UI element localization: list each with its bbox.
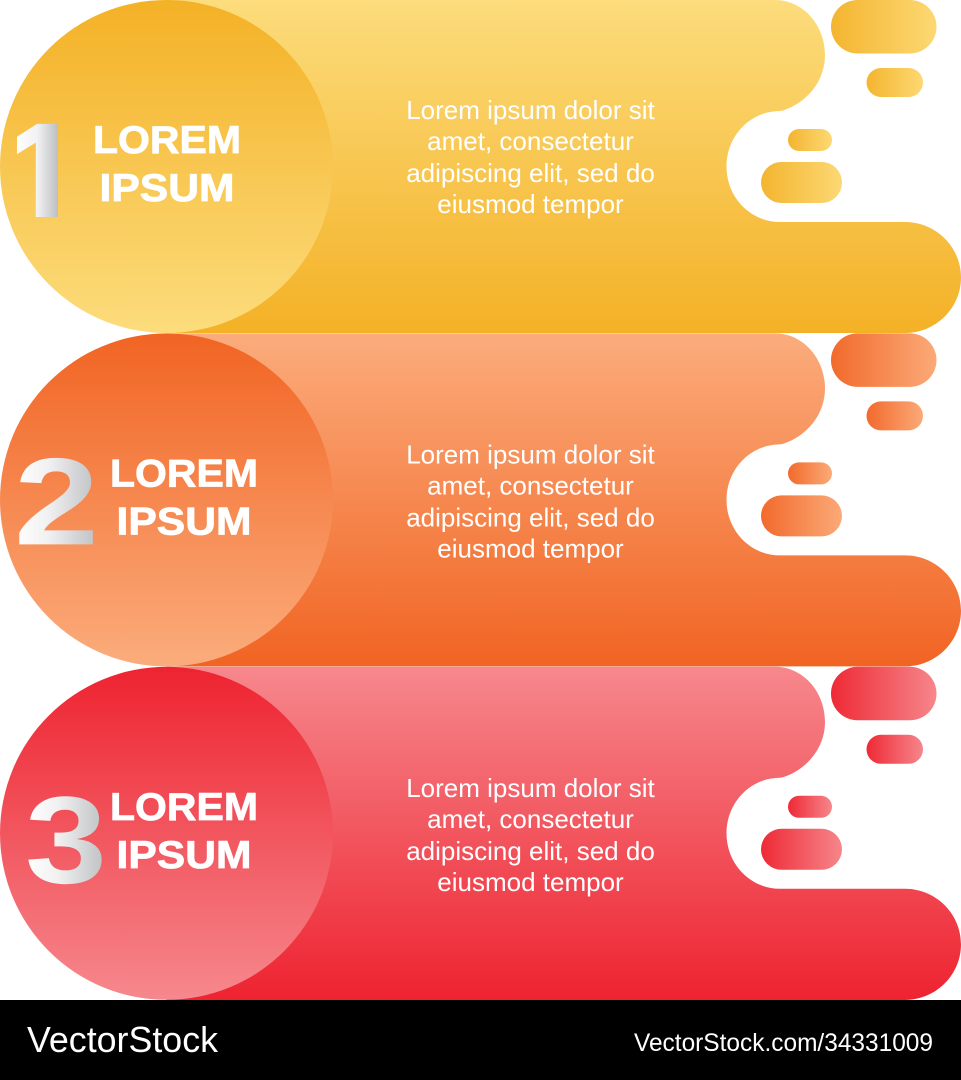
- pill: lower small: [788, 462, 832, 484]
- pill: lower small: [788, 129, 832, 151]
- body text: Lorem ipsum dolor sit: [406, 773, 656, 803]
- band: step 2: [166, 333, 961, 666]
- pill: lower small: [788, 796, 832, 818]
- number 3: 3: [25, 772, 107, 910]
- heading: IPSUM: [116, 500, 252, 543]
- pill: top small: [866, 735, 923, 764]
- body text: Lorem ipsum dolor sit: [406, 95, 656, 125]
- pill: top large: [831, 0, 936, 54]
- body text: amet, consectetur: [427, 126, 634, 156]
- panel: step 1: [0, 0, 961, 333]
- body text: eiusmod tempor: [437, 533, 624, 563]
- body text: adipiscing elit, sed do: [406, 158, 655, 188]
- body text: amet, consectetur: [427, 470, 634, 500]
- circle badge: [0, 333, 333, 666]
- heading: [110, 452, 258, 543]
- footer logo text: VectorStock: [27, 1019, 219, 1060]
- pill: top small: [866, 401, 923, 430]
- body text: eiusmod tempor: [437, 867, 624, 897]
- band: step 3: [166, 667, 961, 1000]
- body text: adipiscing elit, sed do: [406, 502, 655, 532]
- footer bar: [0, 1000, 961, 1080]
- body text: adipiscing elit, sed do: [406, 836, 655, 866]
- heading: LOREM: [93, 119, 241, 162]
- pill: top large: [831, 667, 936, 720]
- body text: Lorem ipsum dolor sit: [406, 439, 656, 469]
- heading: [110, 786, 258, 877]
- panel: step 2: [0, 333, 961, 666]
- heading: IPSUM: [100, 167, 234, 210]
- pill: lower large: [761, 495, 842, 536]
- number 1: 1: [0, 89, 88, 268]
- heading: IPSUM: [116, 834, 252, 877]
- footer image id: VectorStock.com/34331009: [634, 1029, 933, 1057]
- heading: LOREM: [110, 786, 258, 829]
- number 2: 2: [14, 433, 99, 571]
- circle badge: [0, 0, 333, 333]
- heading: [93, 119, 241, 210]
- body text: [406, 773, 656, 897]
- heading: LOREM: [110, 452, 258, 495]
- body text: eiusmod tempor: [437, 189, 624, 219]
- pill: top small: [866, 68, 923, 97]
- pill: top large: [831, 333, 936, 387]
- pill: lower large: [761, 829, 842, 870]
- circle badge: [0, 667, 333, 1000]
- body text: [406, 95, 656, 219]
- pill: lower large: [761, 162, 842, 203]
- body text: amet, consectetur: [427, 804, 634, 834]
- panel: step 3: [0, 667, 961, 1000]
- body text: [406, 439, 656, 563]
- band: step 1: [166, 0, 961, 333]
